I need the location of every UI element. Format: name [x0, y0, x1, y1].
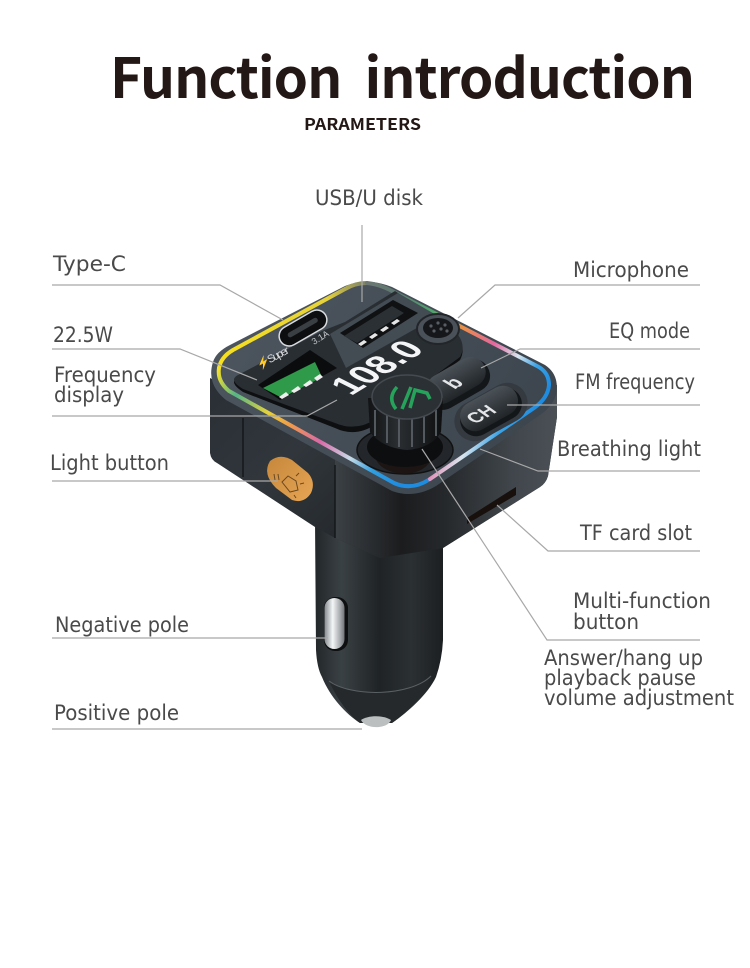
- display reflection: [330, 293, 438, 368]
- label: Negative pole: Negative pole: [55, 613, 189, 637]
- leader lines: [52, 225, 700, 729]
- type-c port: [275, 306, 331, 350]
- subtitle: PARAMETERS: [304, 111, 421, 135]
- button: CH: [447, 376, 535, 448]
- label: button functions: Answer/hang up: [544, 646, 703, 670]
- usb port: [340, 300, 418, 348]
- button: b: [419, 351, 496, 416]
- light button: [267, 457, 313, 501]
- body side faces: [210, 378, 557, 558]
- plug cylinder: [315, 520, 443, 727]
- label: button functions: [544, 646, 734, 710]
- label: FM frequency: FM frequency: [575, 370, 695, 394]
- button: CH: CH: [461, 402, 501, 427]
- port labels: ⚡Super: [254, 344, 292, 372]
- icon: positive tip: [361, 716, 391, 727]
- label: USB/U disk: USB/U disk: [315, 186, 424, 210]
- label: button functions: volume adjustment: [544, 686, 734, 710]
- label: TF card slot: TF card slot: [579, 521, 692, 545]
- icon: microphone: [417, 314, 459, 344]
- icon: phone and music glyph: [392, 387, 430, 409]
- tf card slot: [467, 487, 516, 524]
- label: Type-C: Type-C: [52, 252, 126, 276]
- product: car charger: [210, 282, 557, 727]
- frequency display readout: 108.0: [322, 335, 434, 400]
- label: Frequency display: display: [54, 383, 124, 407]
- multi-function knob: [357, 375, 453, 474]
- label: 22.5W: 22.5W: [53, 323, 113, 347]
- title: Function introduction: [110, 34, 695, 114]
- label: Microphone: Microphone: [573, 258, 689, 282]
- label: Positive pole: Positive pole: [54, 701, 179, 725]
- label: Multi-function button: Multi-function: [573, 589, 711, 613]
- icon: negative contact: [324, 597, 348, 651]
- dark control panel: [234, 291, 463, 432]
- button: b: b: [438, 374, 469, 392]
- usb green port: [258, 350, 337, 400]
- label: Multi-function button: [573, 589, 711, 634]
- product: car charger: 3.1A: [310, 328, 331, 347]
- light ring: [219, 283, 549, 486]
- icon: headlight: [274, 473, 304, 498]
- label: button functions: playback pause: [544, 666, 696, 690]
- label: EQ mode: EQ mode: [609, 319, 690, 343]
- top face: [211, 282, 557, 494]
- label: Multi-function button: button: [573, 610, 639, 634]
- label: Frequency display: Frequency: [54, 363, 156, 387]
- label: Frequency display: [54, 363, 156, 407]
- label: Light button: Light button: [50, 451, 169, 475]
- label: Breathing light: Breathing light: [557, 437, 701, 461]
